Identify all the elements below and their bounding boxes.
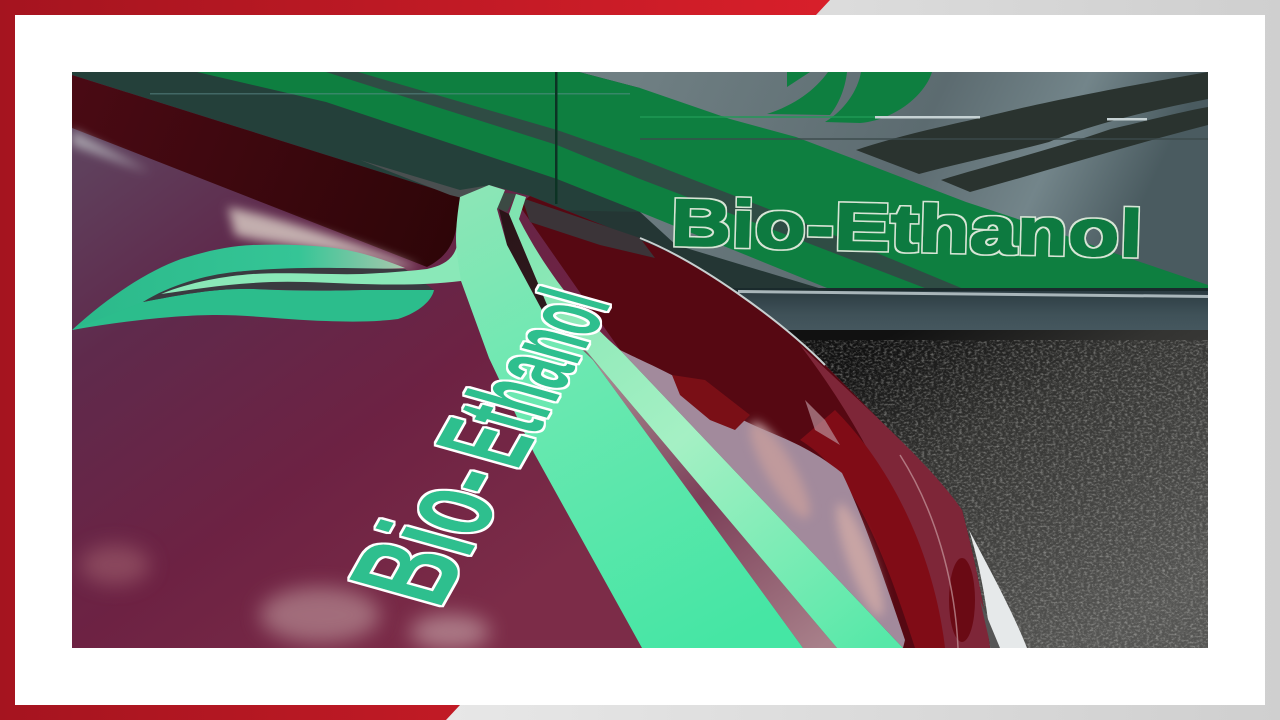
upper leaf xyxy=(72,245,405,330)
door text: Bio-Ethanol xyxy=(670,186,1144,271)
stripe gap xyxy=(499,209,837,648)
leaf emblem xyxy=(72,240,470,330)
sky reflection xyxy=(620,350,905,648)
dark windshield band xyxy=(72,75,460,267)
outer fender band xyxy=(800,345,990,648)
hood text: Bio- xyxy=(318,446,542,618)
clouds on hood xyxy=(228,207,420,268)
mint stripes xyxy=(318,185,903,648)
wiper recess xyxy=(522,198,655,258)
hood highlights xyxy=(805,400,840,445)
lower leaf xyxy=(72,289,434,330)
hood text: Ethanol xyxy=(407,272,638,478)
headlight chrome xyxy=(969,530,1027,648)
hood text xyxy=(347,284,612,608)
asphalt ground xyxy=(788,330,1208,648)
dark red right panel xyxy=(519,196,990,648)
main stripe xyxy=(456,185,803,648)
maroon hood xyxy=(72,75,1027,650)
stem xyxy=(161,248,461,294)
photo: two cars with Bio-Ethanol livery xyxy=(72,72,1208,650)
leaf gap xyxy=(143,268,434,302)
background car door xyxy=(72,72,1208,330)
secondary stripe xyxy=(509,194,903,648)
red reflection xyxy=(672,375,750,430)
